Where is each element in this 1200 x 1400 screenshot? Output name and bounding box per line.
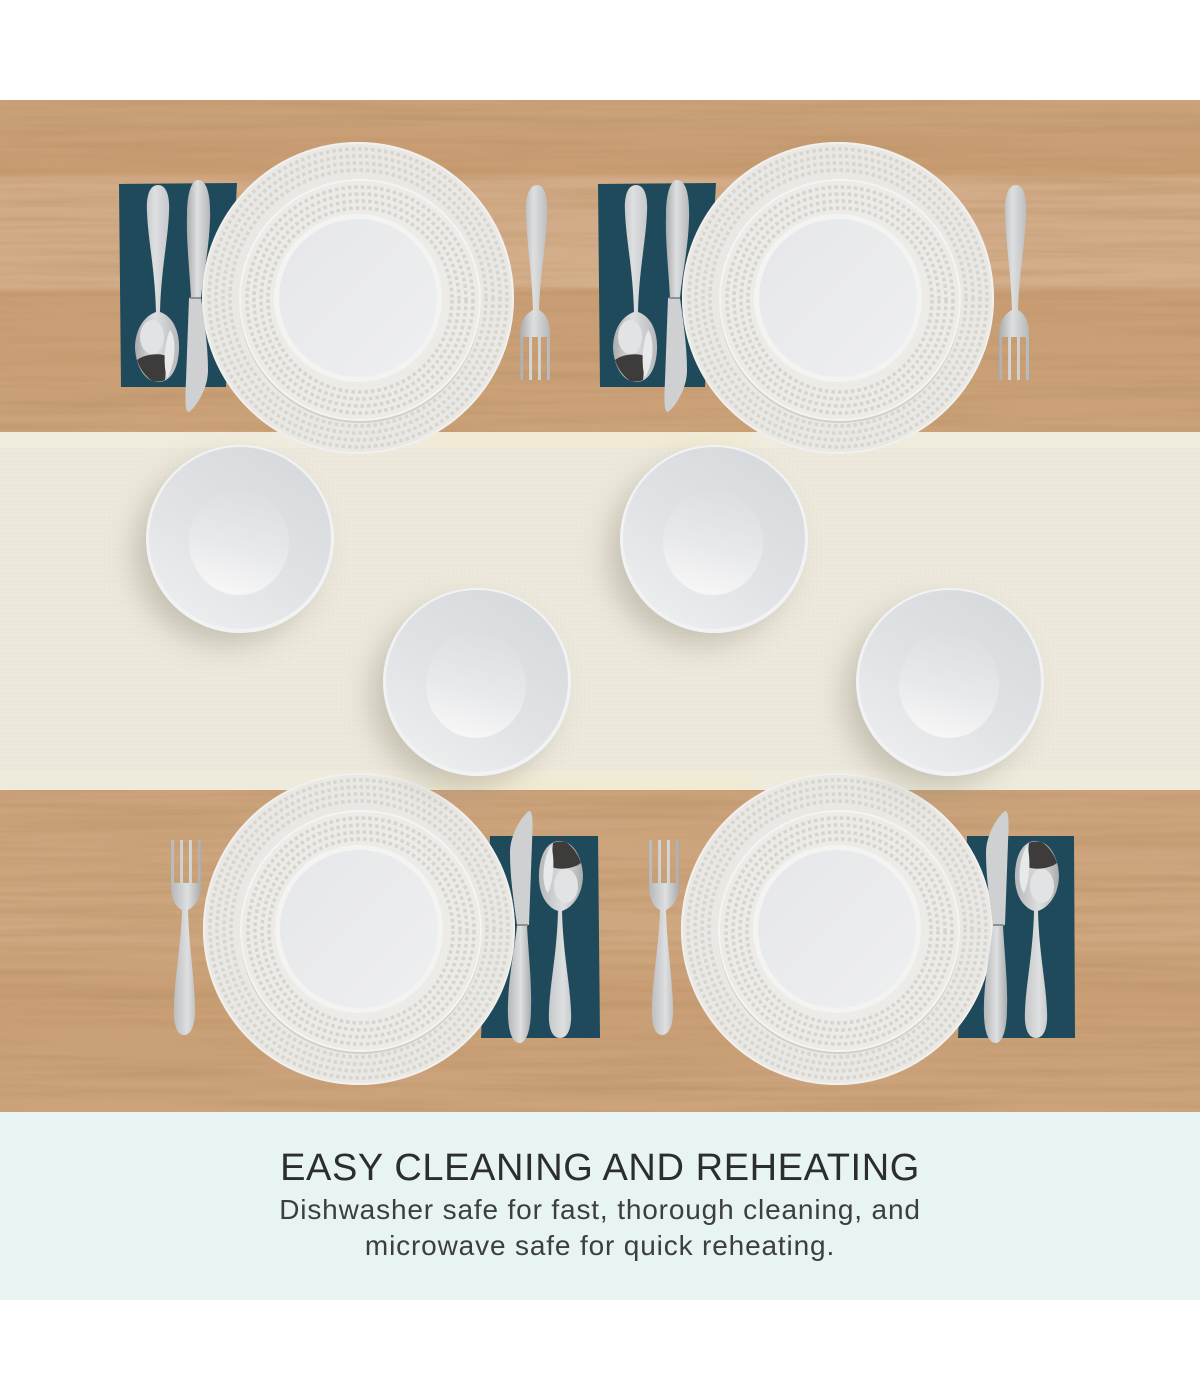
spoon <box>613 185 657 382</box>
plate <box>203 773 515 1085</box>
bowl: lower right <box>844 588 1044 788</box>
wood table background <box>0 100 1200 1112</box>
spoon <box>135 185 179 382</box>
place setting: bottom left <box>171 773 600 1085</box>
place setting: bottom right <box>649 773 1075 1085</box>
plate <box>202 142 514 454</box>
knife <box>664 180 689 412</box>
description text: microwave safe for quick reheating. <box>365 1230 835 1261</box>
plate <box>682 142 994 454</box>
place setting: top right <box>598 142 1029 454</box>
bowl: lower left <box>371 588 571 788</box>
fork <box>520 185 550 380</box>
napkin <box>958 836 1075 1038</box>
knife <box>984 811 1009 1043</box>
knife <box>185 180 210 412</box>
fork <box>999 185 1029 380</box>
caption panel <box>0 1112 1200 1300</box>
napkin <box>119 183 237 387</box>
fork <box>649 840 679 1035</box>
plate <box>681 773 993 1085</box>
bowl: upper left <box>134 445 334 645</box>
knife <box>508 811 533 1043</box>
bowl: upper right <box>608 445 808 645</box>
fork <box>171 840 201 1035</box>
napkin <box>598 183 716 387</box>
heading: EASY CLEANING AND REHEATING <box>280 1147 920 1189</box>
spoon <box>1015 841 1059 1038</box>
napkin <box>481 836 600 1038</box>
description text <box>279 1194 921 1261</box>
table runner <box>0 432 1200 790</box>
spoon <box>539 841 583 1038</box>
place setting: top left <box>119 142 550 454</box>
description text: Dishwasher safe for fast, thorough cleaning, and <box>279 1194 921 1225</box>
